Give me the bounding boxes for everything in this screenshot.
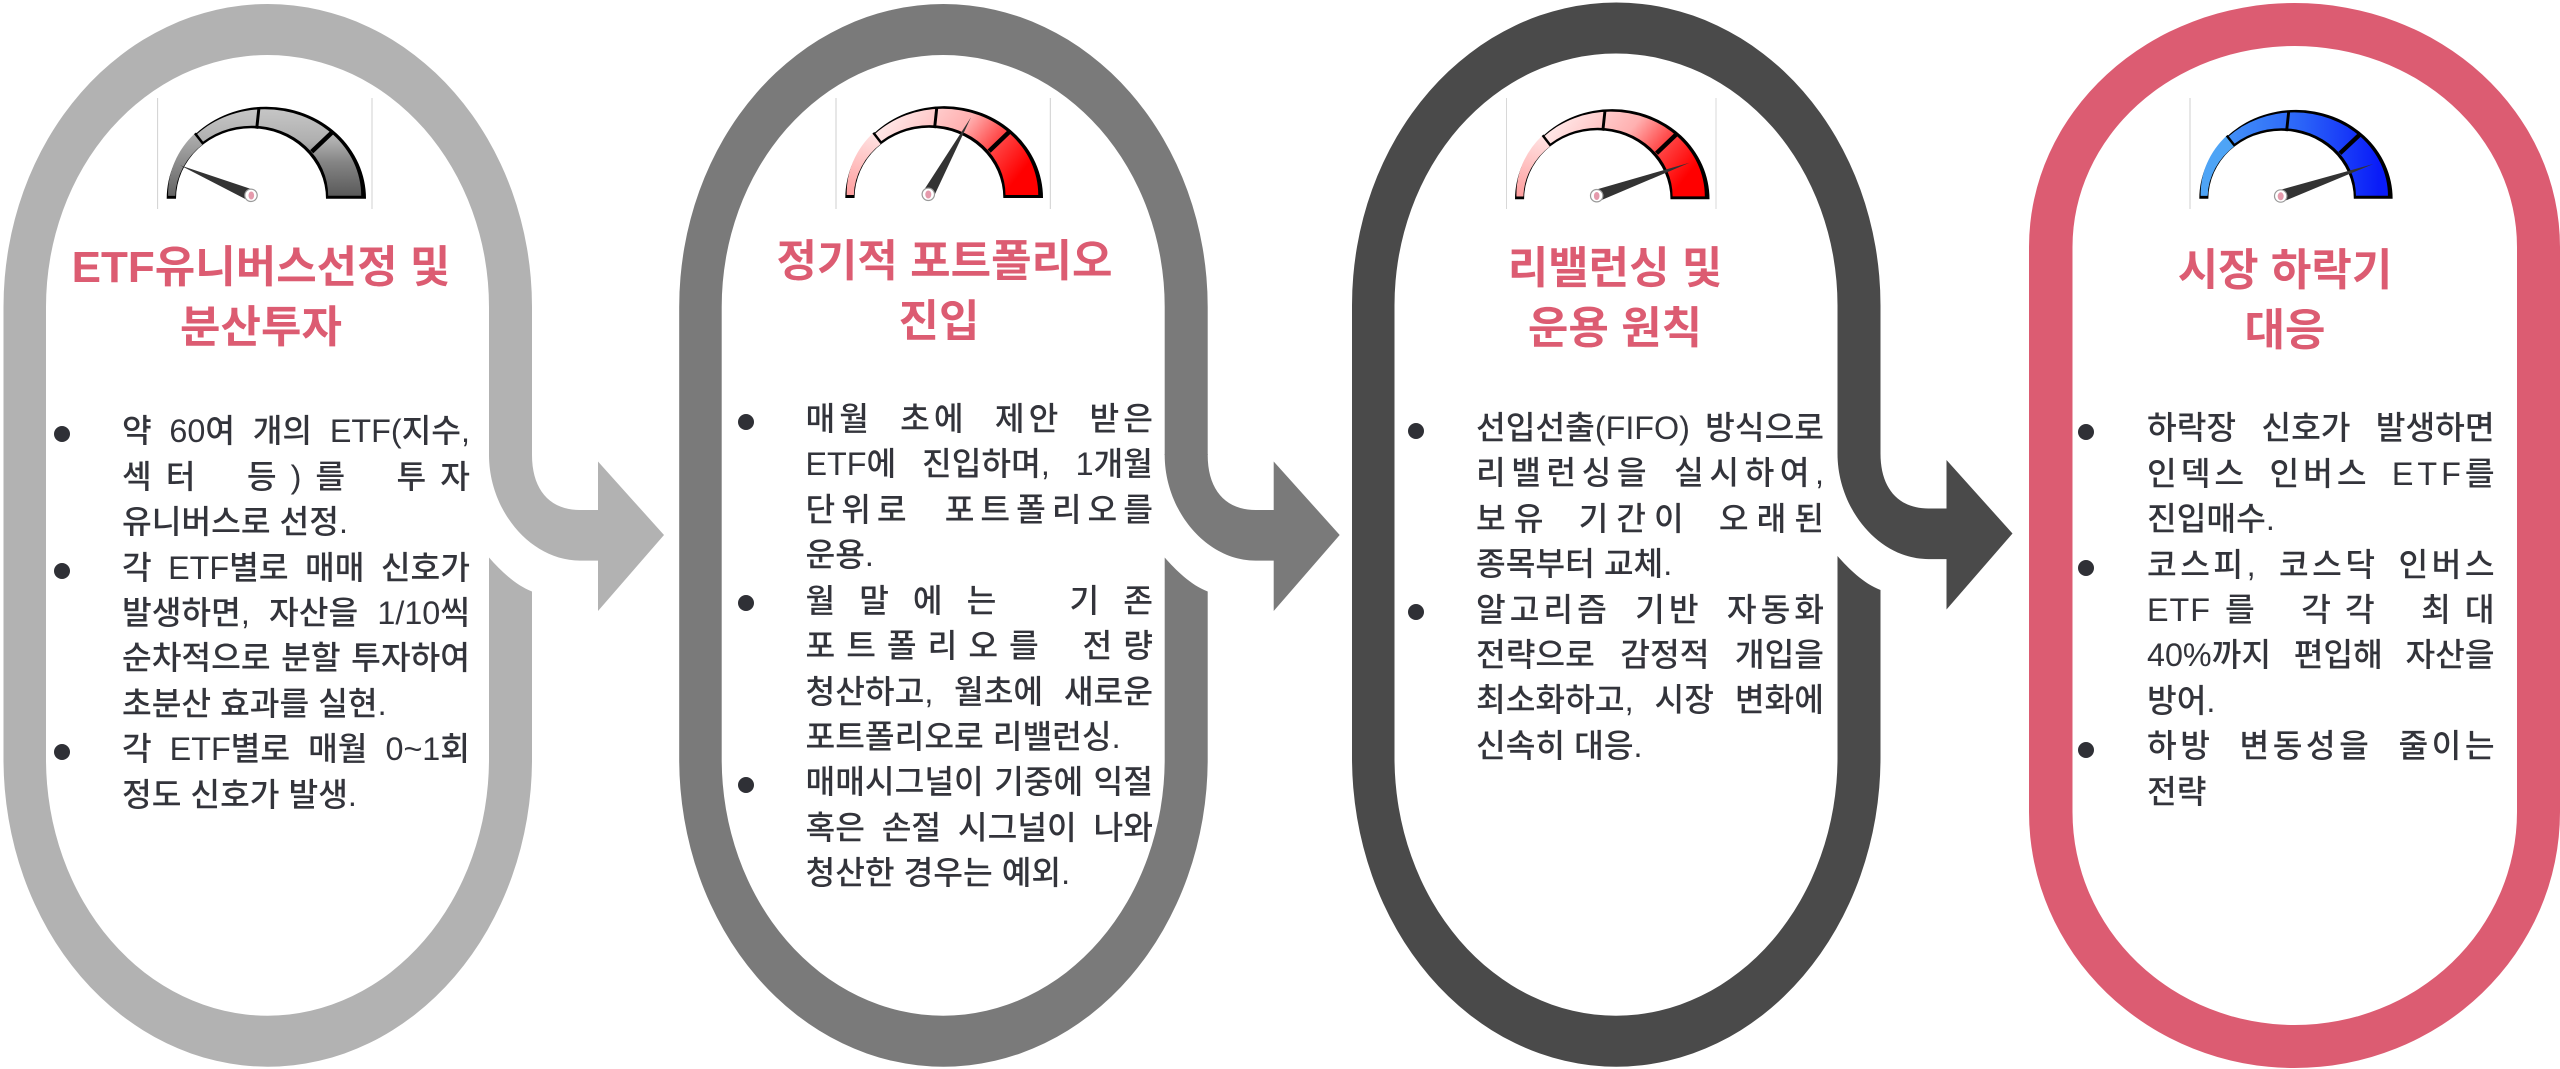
text block: universe bullets: 정도 신호가 발생. bbox=[122, 777, 357, 813]
heading: rebalancing: 운용 원칙 bbox=[1528, 304, 1702, 353]
text block: downturn bullets: 전략 bbox=[2147, 774, 2206, 810]
text block: entry bullets: 월말에는 기존 bbox=[805, 583, 1177, 619]
ring: mid-gray capsule bbox=[679, 4, 1208, 1067]
text block: downturn bullets: 진입매수. bbox=[2147, 501, 2275, 537]
text block: universe bullets: 섹터 등)를 투자 bbox=[122, 459, 484, 495]
arrow: gray to next step bbox=[489, 454, 664, 611]
heading: market downturn: 대응 bbox=[2245, 306, 2325, 355]
heading: rebalancing: 리밸런싱 및 bbox=[1508, 244, 1722, 293]
arrow: dark to next step bbox=[1838, 452, 2012, 610]
text block: entry bullets: 청산한 경우는 예외. bbox=[805, 855, 1070, 891]
text block: rebalancing bullets: 리밸런싱을 실시하여, bbox=[1476, 455, 1830, 491]
ring: pink capsule bbox=[2029, 3, 2560, 1068]
text block: entry bullets: 매매시그널이 기중에 익절 bbox=[805, 764, 1153, 800]
text block: rebalancing bullets: 알고리즘 기반 자동화 bbox=[1476, 592, 1828, 628]
panel: rebalancing principles bbox=[1352, 2, 2012, 1067]
text block: downturn bullets bbox=[2078, 410, 2509, 810]
text block: entry bullets bbox=[738, 401, 1177, 891]
icon: blue gauge bbox=[2190, 98, 2393, 209]
text block: rebalancing bullets: 신속히 대응. bbox=[1476, 728, 1643, 764]
panel: market downturn response bbox=[2029, 3, 2560, 1068]
text block: downturn bullets: 40%까지 편입해 자산을 bbox=[2147, 637, 2495, 673]
text block: entry bullets: ETF에 진입하며, 1개월 bbox=[805, 446, 1153, 482]
text block: entry bullets: 포트폴리오를 전량 bbox=[805, 628, 1164, 664]
text block: entry bullets: 청산하고, 월초에 새로운 bbox=[805, 674, 1153, 710]
panel: ETF universe selection bbox=[4, 4, 664, 1067]
heading: portfolio entry: 정기적 포트폴리오 bbox=[776, 237, 1113, 286]
text block: universe bullets: 초분산 효과를 실현. bbox=[122, 686, 387, 722]
heading: market downturn: 시장 하락기 bbox=[2178, 246, 2392, 295]
text block: entry bullets: 매월 초에 제안 받은 bbox=[805, 401, 1157, 437]
text block: universe bullets: 각 ETF별로 매매 신호가 bbox=[122, 550, 470, 586]
heading: portfolio entry: 진입 bbox=[899, 297, 979, 346]
text block: downturn bullets: ETF 를 각각 최대 bbox=[2147, 592, 2509, 628]
ring: gray capsule bbox=[4, 4, 532, 1067]
text block: downturn bullets: 코스피, 코스닥 인버스 bbox=[2147, 547, 2498, 583]
heading: ETF universe bbox=[72, 243, 450, 352]
text block: rebalancing bullets: 종목부터 교체. bbox=[1476, 546, 1672, 582]
text block: universe bullets: 각 ETF별로 매월 0~1회 bbox=[122, 731, 470, 767]
text block: entry bullets: 혹은 손절 시그널이 나와 bbox=[805, 810, 1153, 846]
text block: downturn bullets: 인덱스 인버스 ETF를 bbox=[2147, 456, 2499, 492]
text block: universe bullets: 유니버스로 선정. bbox=[122, 504, 348, 540]
text block: entry bullets: 운용. bbox=[805, 537, 874, 573]
text block: rebalancing bullets: 보유 기간이 오래된 bbox=[1476, 501, 1832, 537]
text block: rebalancing bullets: 선입선출(FIFO) 방식으로 bbox=[1476, 410, 1824, 446]
heading: market downturn bbox=[2178, 246, 2392, 355]
text block: universe bullets: 약 60여 개의 ETF(지수, bbox=[122, 413, 470, 449]
text block: downturn bullets: 하방 변동성을 줄이는 bbox=[2147, 728, 2498, 764]
text block: downturn bullets: 하락장 신호가 발생하면 bbox=[2147, 410, 2495, 446]
heading: ETF universe: ETF유니버스선정 및 bbox=[72, 243, 450, 292]
panel: regular portfolio entry bbox=[679, 4, 1340, 1067]
text block: universe bullets bbox=[54, 413, 484, 813]
text block: downturn bullets: 방어. bbox=[2147, 683, 2215, 719]
text block: rebalancing bullets: 최소화하고, 시장 변화에 bbox=[1476, 682, 1824, 718]
text block: rebalancing bullets: 전략으로 감정적 개입을 bbox=[1476, 637, 1824, 673]
icon: red gauge high bbox=[1506, 98, 1716, 209]
ring: dark capsule bbox=[1352, 3, 1880, 1067]
icon: red gauge bbox=[836, 98, 1050, 209]
text block: entry bullets: 포트폴리오로 리밸런싱. bbox=[805, 719, 1121, 755]
text block: universe bullets: 발생하면, 자산을 1/10씩 bbox=[122, 595, 470, 631]
heading: ETF universe: 분산투자 bbox=[180, 303, 342, 352]
heading: portfolio entry bbox=[776, 237, 1113, 346]
heading: rebalancing bbox=[1508, 244, 1722, 353]
icon: gray gauge bbox=[158, 98, 372, 209]
text block: entry bullets: 단위로 포트폴리오를 bbox=[805, 492, 1159, 528]
arrow: mid-gray to next step bbox=[1165, 454, 1340, 611]
text block: universe bullets: 순차적으로 분할 투자하여 bbox=[122, 640, 470, 676]
text block: rebalancing bullets bbox=[1408, 410, 1832, 764]
